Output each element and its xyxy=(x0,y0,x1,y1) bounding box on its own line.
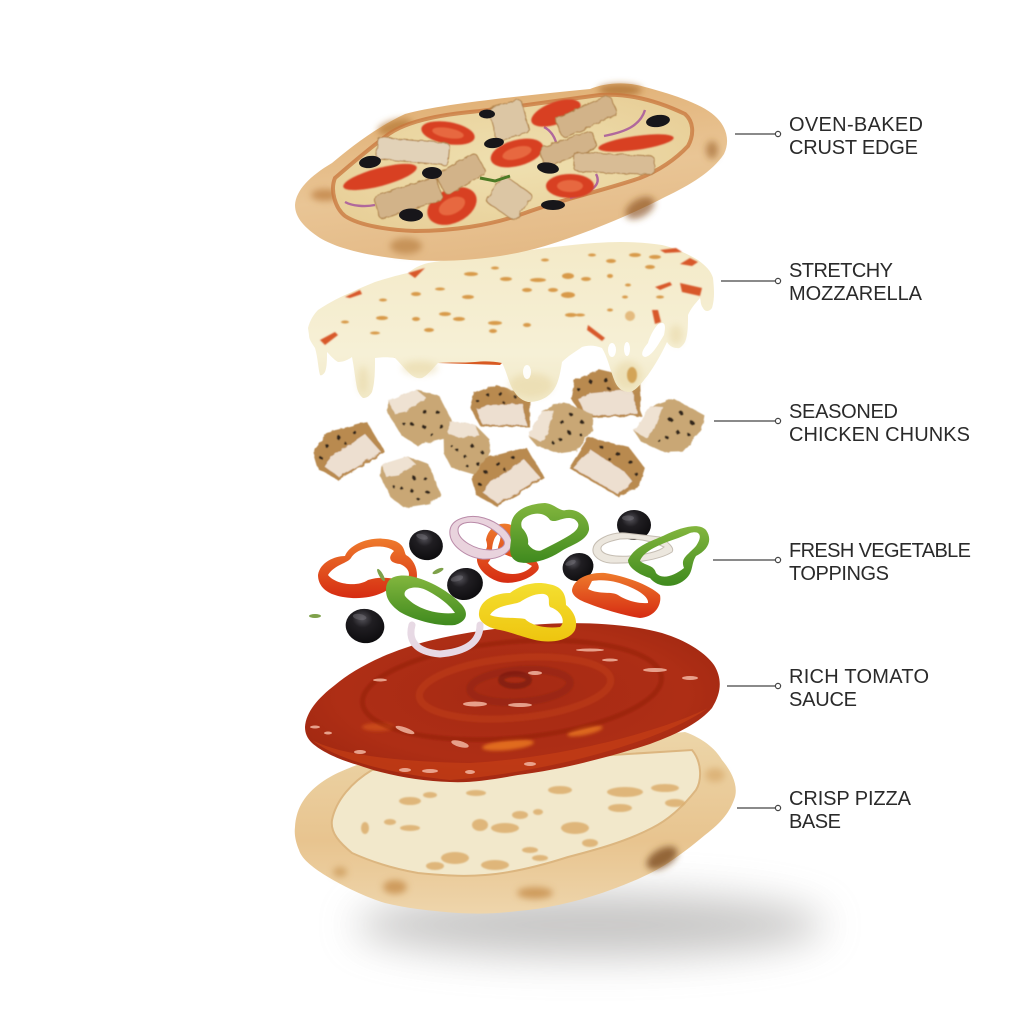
crust browning xyxy=(311,84,718,254)
onion ring: lower xyxy=(411,625,480,654)
chicken chunk 7 xyxy=(521,393,603,465)
herb flecks xyxy=(309,567,444,618)
chicken chunk 3 xyxy=(461,370,544,449)
label: crisp pizza base: BASE xyxy=(789,811,841,833)
pepper ring: red centre xyxy=(477,524,539,583)
label: rich tomato sauce xyxy=(727,666,929,711)
onion slices xyxy=(345,110,645,206)
label: oven-baked crust edge: OVEN-BAKED xyxy=(789,114,923,136)
sauce warm patches xyxy=(362,723,603,753)
label: seasoned chicken chunks: CHICKEN CHUNKS xyxy=(789,424,970,446)
cheese drip shading xyxy=(358,325,683,397)
onion ring: right xyxy=(593,533,673,563)
label: oven-baked crust edge: CRUST EDGE xyxy=(789,137,918,159)
pepper ring: red left xyxy=(318,539,417,598)
layer: seasoned chicken chunks xyxy=(313,352,712,519)
pepper ring: green top xyxy=(510,503,589,563)
label: rich tomato sauce: SAUCE xyxy=(789,689,857,711)
chicken chunk 8 xyxy=(369,446,450,519)
tomato slices xyxy=(341,94,675,232)
tomato flesh xyxy=(431,125,583,219)
onion ring: top xyxy=(450,516,512,559)
base crust browning xyxy=(333,768,725,899)
label: fresh vegetable toppings: TOPPINGS xyxy=(789,563,889,585)
ground shadow xyxy=(355,893,825,957)
cheese holes xyxy=(523,342,630,379)
pizza cheese surface xyxy=(333,95,692,231)
pepper ring: green lower xyxy=(386,576,466,625)
chicken chunk 5 xyxy=(629,392,712,462)
label: crisp pizza base xyxy=(737,788,912,833)
base toasted spots xyxy=(361,784,685,870)
pizza olives xyxy=(358,110,671,222)
label: stretchy mozzarella: MOZZARELLA xyxy=(789,283,923,305)
base inner crumb xyxy=(332,750,700,876)
green pepper bits xyxy=(480,176,510,181)
chicken chunk 9 xyxy=(471,447,545,507)
label: seasoned chicken chunks: SEASONED xyxy=(789,401,898,423)
label: crisp pizza base: CRISP PIZZA xyxy=(789,788,912,810)
sauce swirl xyxy=(358,629,666,751)
pizza crust xyxy=(295,83,727,261)
label: rich tomato sauce: RICH TOMATO xyxy=(789,666,929,688)
label: stretchy mozzarella xyxy=(721,260,923,305)
sauce lower edge xyxy=(312,708,708,780)
label: stretchy mozzarella: STRETCHY xyxy=(789,260,893,282)
chicken chunk 4 xyxy=(561,352,656,442)
chicken slices xyxy=(373,95,654,221)
cheese sheet with drips xyxy=(308,242,714,402)
chicken chunk 1 xyxy=(313,422,385,480)
olive: right middle xyxy=(559,549,597,585)
chicken chunk 2 xyxy=(378,380,464,456)
layer: stretchy mozzarella xyxy=(308,242,714,402)
base crust xyxy=(295,732,736,914)
chicken chunk 6 xyxy=(428,409,505,488)
pepper ring: green right xyxy=(628,526,709,586)
pepper ring: red right xyxy=(572,573,660,618)
olive: top right xyxy=(617,510,651,540)
pepper ring: yellow xyxy=(479,583,576,642)
red edges xyxy=(320,248,702,345)
olive: top centre left xyxy=(406,526,446,564)
layer: oven-baked pizza xyxy=(295,83,727,261)
sauce body xyxy=(305,623,720,782)
sauce peeking below cheese xyxy=(375,345,520,365)
layer: rich tomato sauce xyxy=(305,623,720,782)
label: fresh vegetable toppings: FRESH VEGETABLE xyxy=(789,540,971,562)
label: fresh vegetable toppings xyxy=(713,540,971,585)
label: oven-baked crust edge xyxy=(735,114,923,159)
layer: crisp pizza base xyxy=(295,732,736,914)
layer: fresh vegetable toppings xyxy=(309,503,709,654)
label: seasoned chicken chunks xyxy=(714,401,970,446)
sauce highlights xyxy=(310,648,698,774)
olive: lower left xyxy=(343,606,387,646)
olive: centre xyxy=(443,564,487,604)
chicken chunk 10 xyxy=(569,437,645,497)
baked cheese spots xyxy=(341,253,664,383)
